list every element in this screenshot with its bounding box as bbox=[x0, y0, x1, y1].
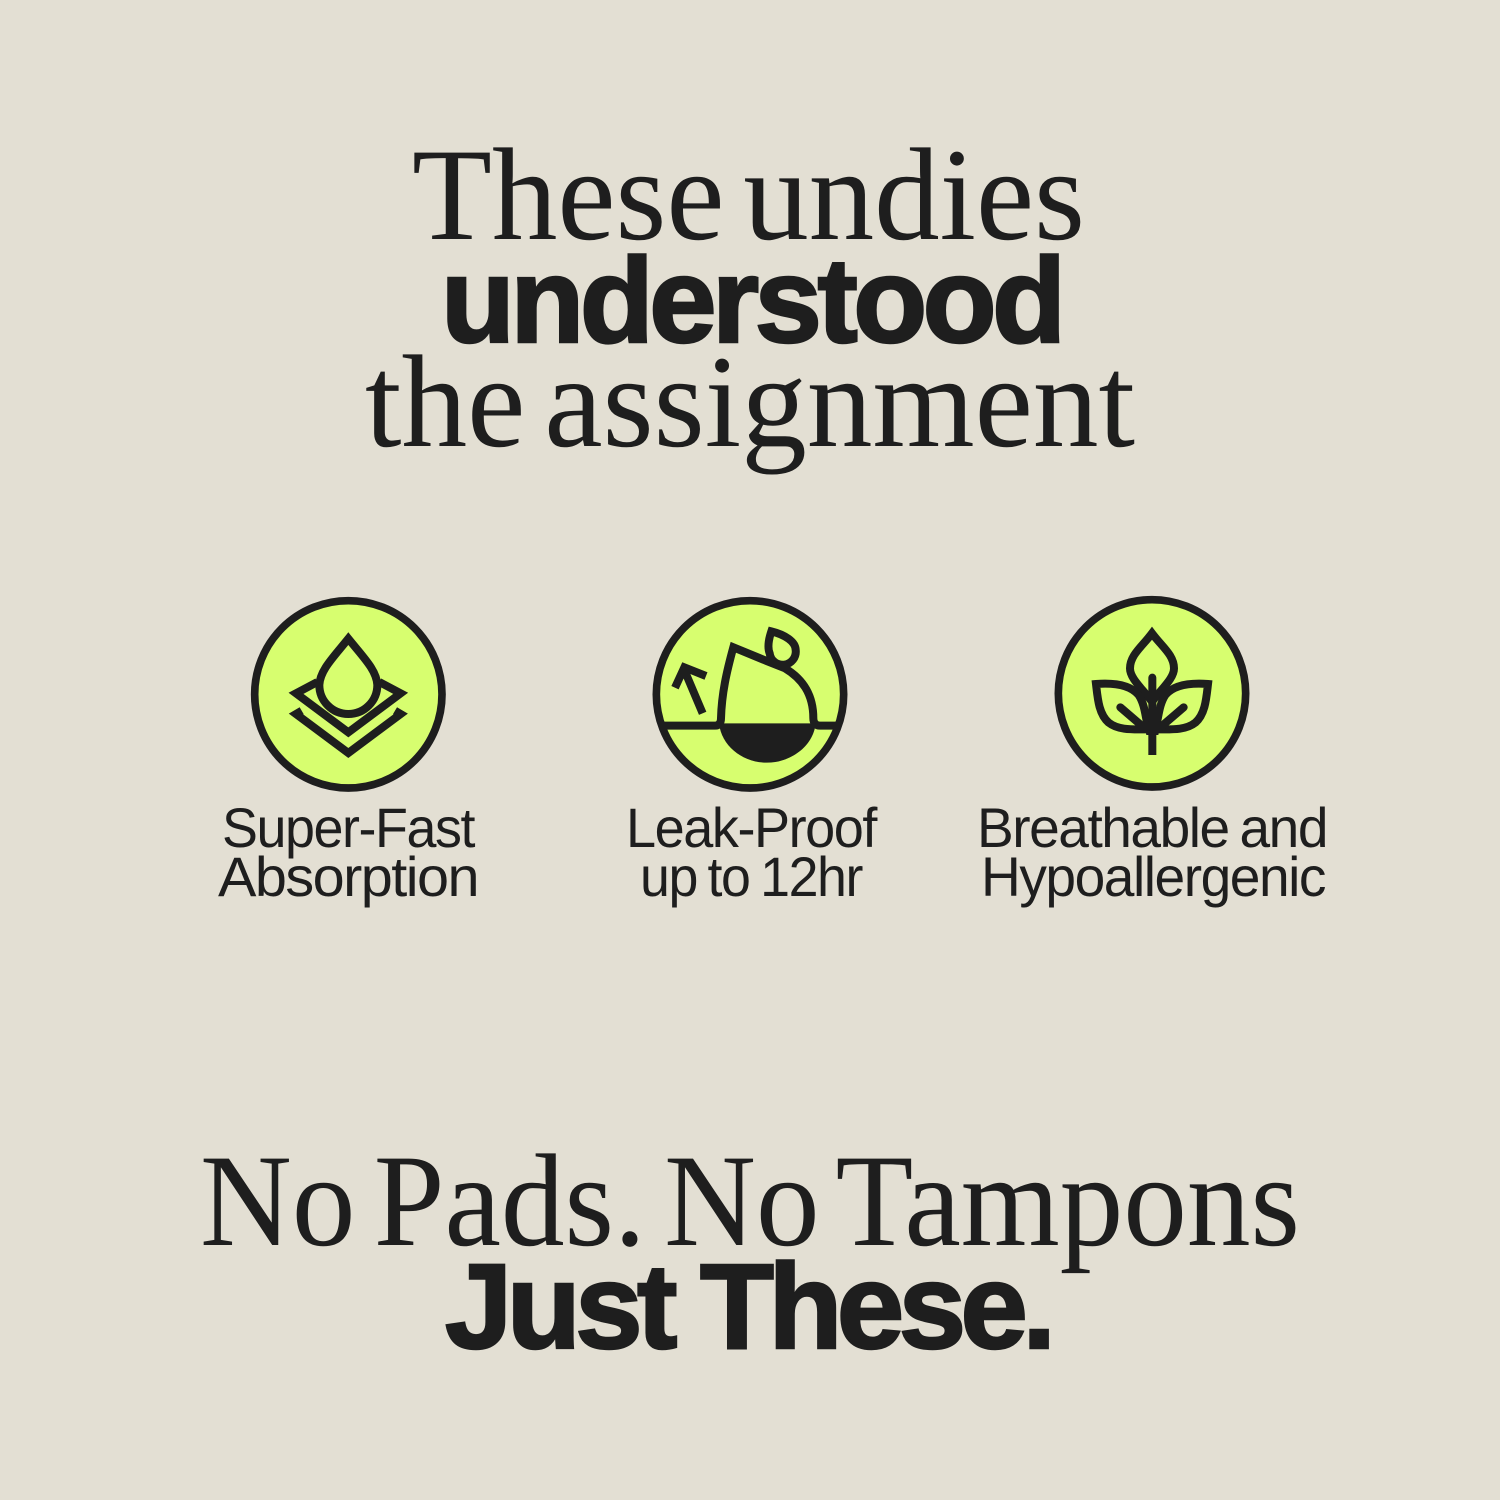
closing statement: Just These. bbox=[445, 1238, 1056, 1374]
icon: three-leaf plant bbox=[1058, 600, 1246, 787]
label: breathable and hypoallergenic: Hypoallergenic bbox=[981, 845, 1325, 908]
label: leak-proof up to 12hr: Leak-Proof bbox=[626, 796, 878, 859]
closing statement bbox=[200, 1127, 1300, 1374]
title bbox=[365, 121, 1135, 475]
title: understood bbox=[441, 232, 1066, 368]
icon: leak-proof liquid shape with arrow bbox=[656, 601, 844, 788]
label: breathable and hypoallergenic: Breathable and bbox=[977, 796, 1327, 859]
label: super-fast absorption bbox=[218, 796, 478, 908]
label: leak-proof up to 12hr: up to 12hr bbox=[640, 845, 863, 908]
title: These undies bbox=[412, 121, 1085, 268]
closing statement: No Pads. No Tampons bbox=[200, 1127, 1300, 1274]
label: leak-proof up to 12hr bbox=[626, 796, 878, 908]
icon: water drop on layers bbox=[255, 601, 442, 788]
title: the assignment bbox=[365, 328, 1135, 475]
label: super-fast absorption: Absorption bbox=[218, 845, 478, 908]
label: breathable and hypoallergenic bbox=[977, 796, 1327, 908]
feature: leak-proof up to 12hr bbox=[626, 601, 878, 908]
feature: breathable and hypoallergenic bbox=[977, 600, 1327, 908]
feature: super-fast absorption bbox=[218, 601, 478, 908]
label: super-fast absorption: Super-Fast bbox=[222, 796, 476, 859]
